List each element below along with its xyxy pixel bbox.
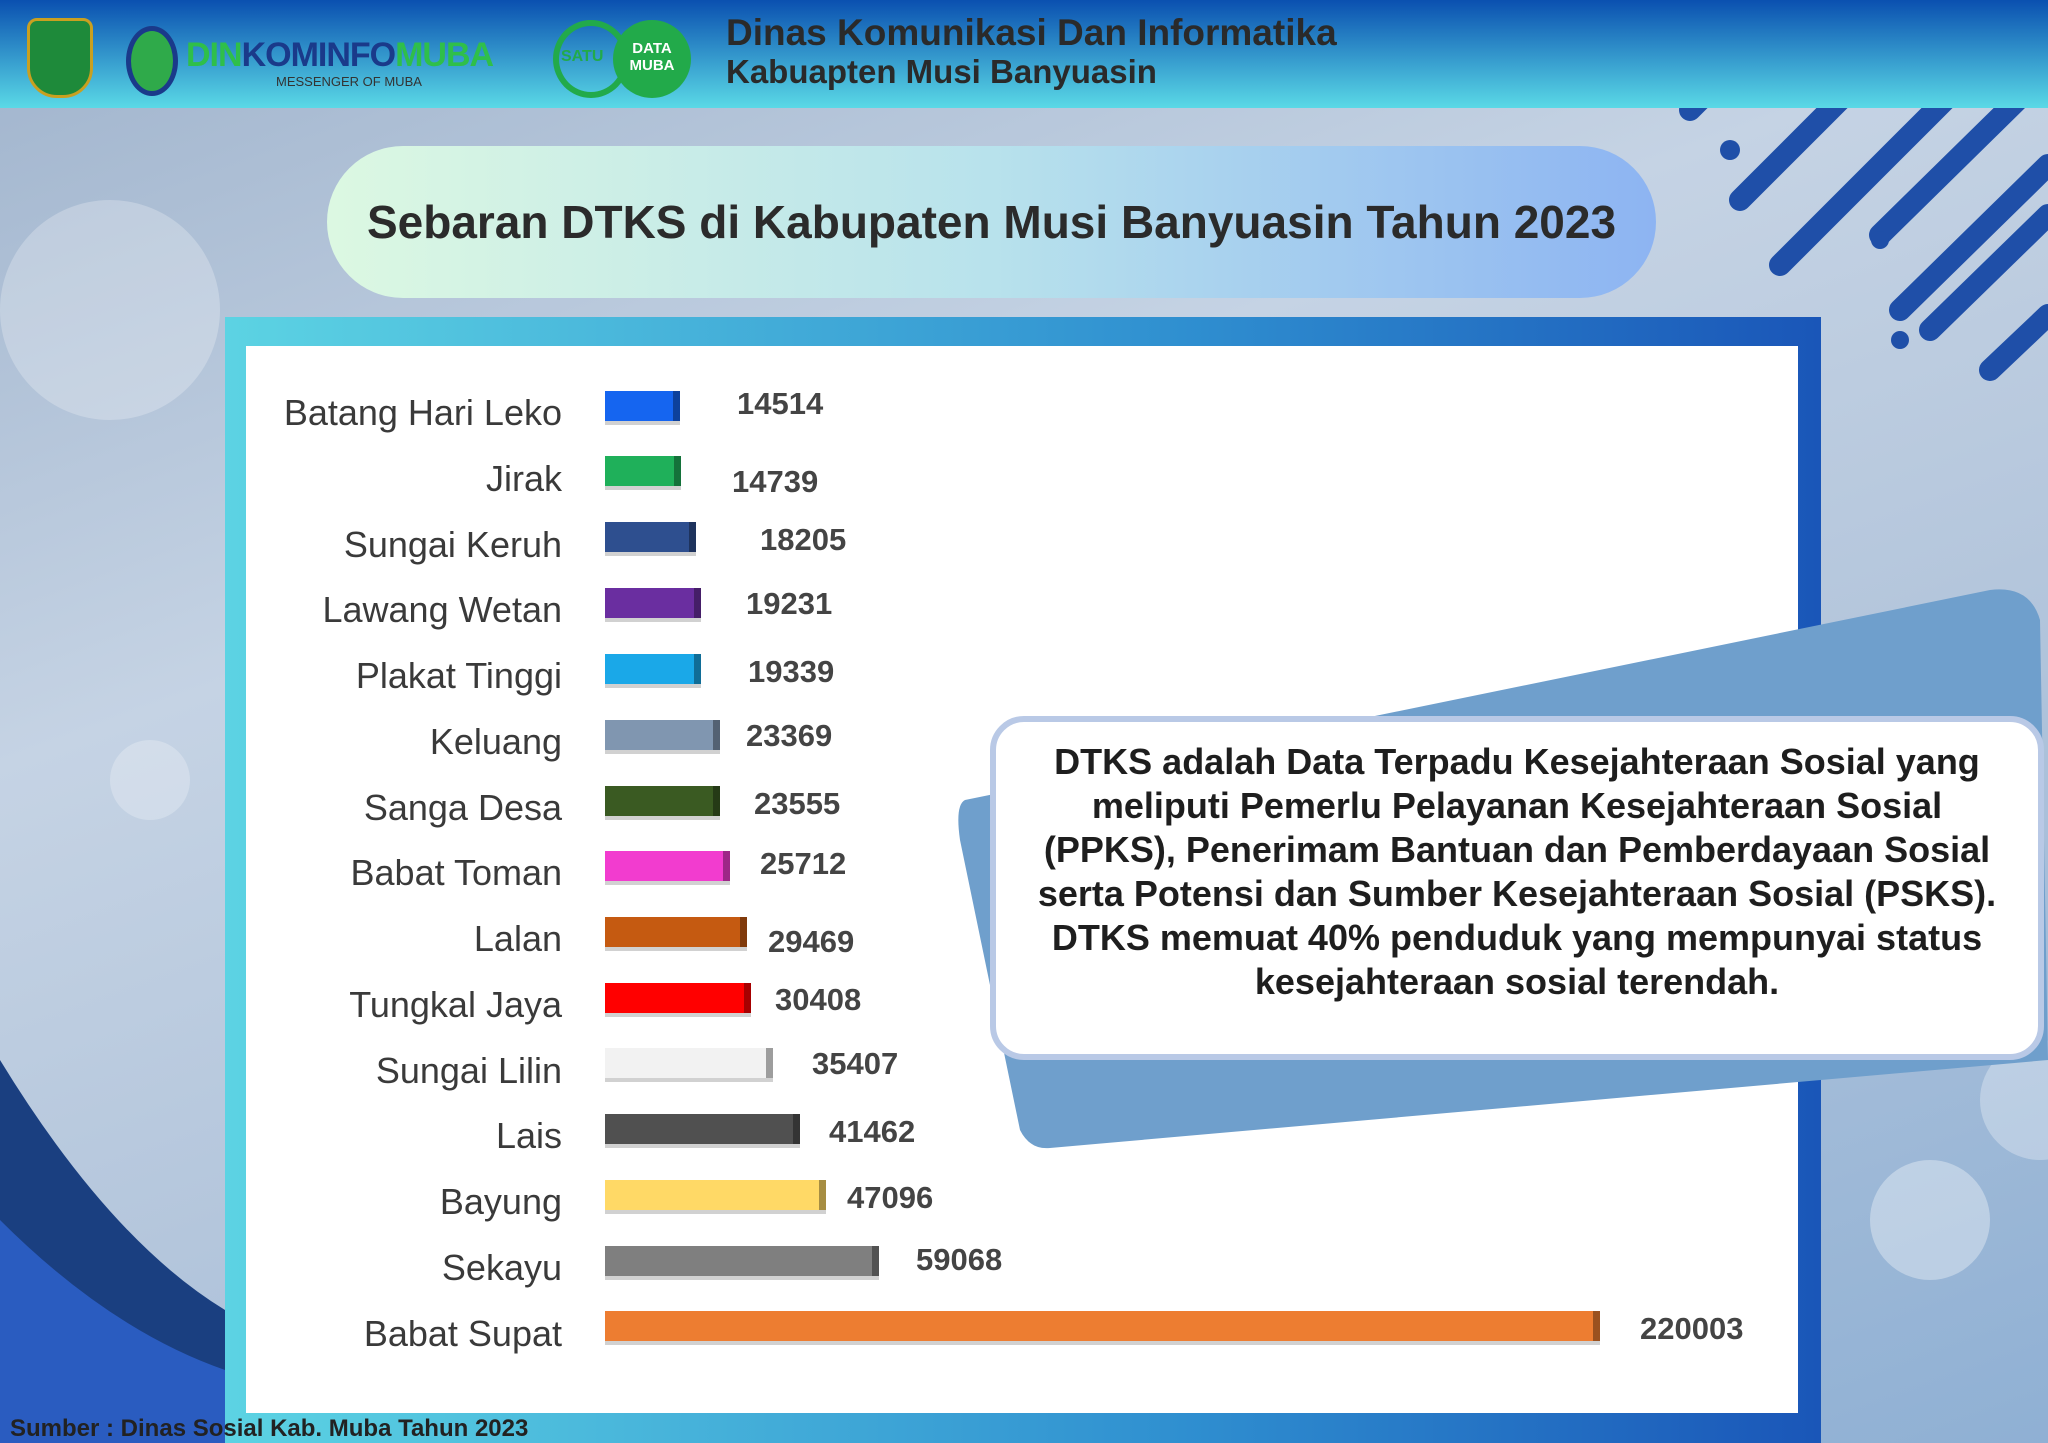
bar chart: 23555 [754,786,840,821]
logo: dinkominfo [126,26,494,96]
bar chart: Batang Hari Leko [284,392,562,433]
callout: DTKS definition [990,716,2044,1060]
chart panel [225,317,1821,1443]
title pill [327,146,1656,298]
bar chart: 47096 [847,1180,933,1215]
header bar [0,0,2048,108]
bar chart: Babat Supat [364,1313,562,1354]
logo: satu data muba: MUBA [630,57,674,74]
bar chart: Sungai Lilin [376,1050,562,1091]
bar chart: 14514 [737,386,823,421]
bar chart: Babat Toman [351,852,562,893]
bar chart: Jirak [486,458,562,499]
bar chart: 14739 [732,464,818,499]
callout: DTKS definition: meliputi Pemerlu Pelayanan Kesejahteraan Sosial [1092,785,1942,826]
bar chart: 220003 [1640,1311,1743,1346]
bar chart: Sekayu [442,1247,562,1288]
logo: dinkominfo: MESSENGER OF MUBA [276,74,422,89]
bar chart: 25712 [760,846,846,881]
source text: Sumber : Dinas Sosial Kab. Muba Tahun 2023 [10,1415,528,1442]
bar chart: Lais [496,1115,562,1156]
callout: DTKS definition: (PPKS), Penerimam Bantuan dan Pemberdayaan Sosial [1044,829,1990,870]
header text: Kabuapten Musi Banyuasin [726,53,1157,90]
bar chart: Tungkal Jaya [349,984,562,1025]
bar chart: Bayung [440,1181,562,1222]
bar chart: 23369 [746,718,832,753]
bar chart: Lawang Wetan [322,589,562,630]
bar chart: 29469 [768,924,854,959]
header text: Dinas Komunikasi Dan Informatika [726,12,1337,53]
callout: DTKS definition: DTKS adalah Data Terpadu Kesejahteraan Sosial yang [1054,741,1980,782]
bar chart: 19339 [748,654,834,689]
bar chart: 19231 [746,586,832,621]
bar chart: 59068 [916,1242,1002,1277]
callout: DTKS definition: DTKS memuat 40% penduduk yang mempunyai status [1052,917,1982,958]
bar chart: Lalan [474,918,562,959]
bar chart: Sanga Desa [364,787,562,828]
bar chart: 41462 [829,1114,915,1149]
header text [726,12,1337,90]
logo: satu data muba: SATU [561,48,603,65]
bar chart: Keluang [430,721,562,762]
bar chart: 18205 [760,522,846,557]
bar chart: 35407 [812,1046,898,1081]
callout: DTKS definition: kesejahteraan sosial terendah. [1255,961,1779,1002]
callout: DTKS definition: serta Potensi dan Sumber Kesejahteraan Sosial (PSKS). [1038,873,1996,914]
icon: regency emblem [27,18,93,98]
bar chart: Plakat Tinggi [356,655,562,696]
logo: satu data muba [553,20,691,98]
bar chart: 30408 [775,982,861,1017]
logo: satu data muba: DATA [632,40,672,57]
title pill: Sebaran DTKS di Kabupaten Musi Banyuasin Tahun 2023 [367,196,1616,248]
logo: dinkominfo: DINKOMINFOMUBA [186,36,493,74]
bar chart: Sungai Keruh [344,524,562,565]
